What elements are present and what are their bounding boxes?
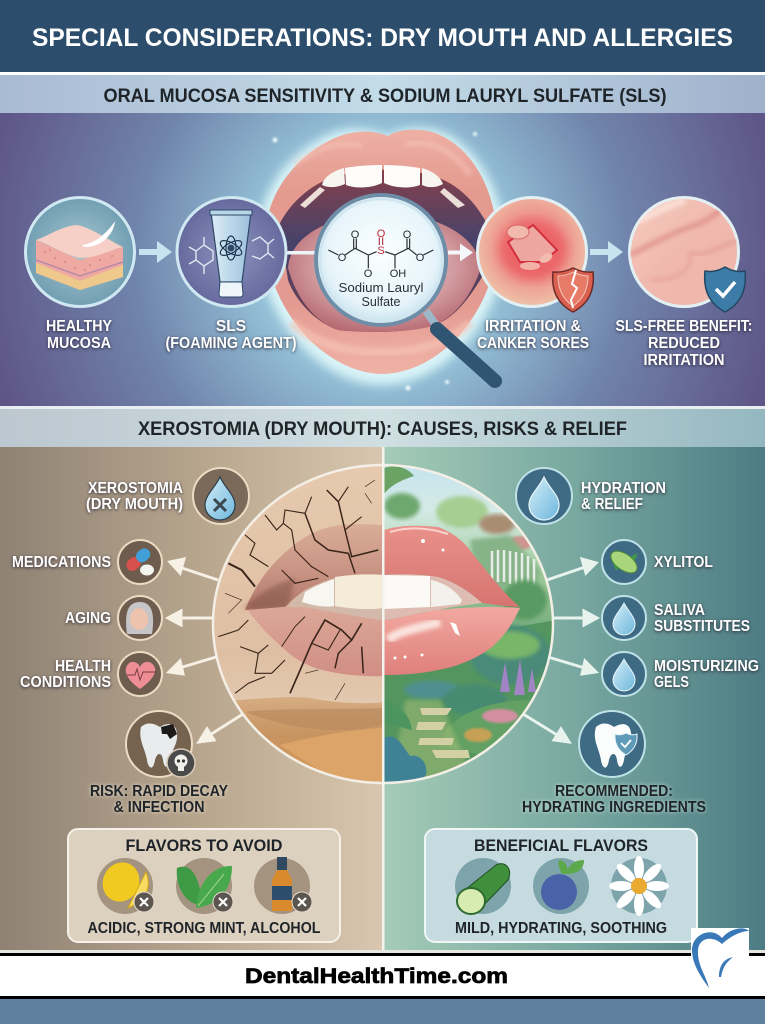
label (654, 602, 750, 635)
arrow: irritation to benefit (590, 241, 623, 263)
icon: tooth with shield (579, 711, 645, 777)
label: healthy mucosa (46, 318, 113, 352)
label: irritation and canker sores (477, 318, 589, 352)
arrow: lips to health conditions (169, 657, 216, 674)
arrow: lips to recommended (523, 714, 569, 742)
icon: magnifying glass with SLS molecule (316, 195, 495, 381)
molecule diagram: O (364, 268, 373, 280)
icon: water drop (602, 652, 646, 696)
label: healthy mucosa: MUCOSA (47, 335, 111, 352)
label: SLS-free benefit: SLS-FREE BENEFIT: (616, 318, 752, 335)
arrow: healthy to SLS (139, 241, 172, 263)
badge: broken red shield (553, 268, 593, 312)
label (581, 480, 666, 513)
arrow: lips to risk (199, 714, 243, 742)
molecule diagram: O (377, 228, 386, 240)
item: moisturizing gels (602, 652, 759, 696)
arrow: SLS to magnifier (286, 251, 318, 254)
label: & RELIEF (581, 496, 643, 513)
molecule diagram: S (377, 245, 385, 257)
molecule diagram: OH (390, 268, 406, 280)
label: & INFECTION (114, 799, 204, 816)
arrow: lips to medications (170, 559, 218, 580)
label: SLS foaming agent: SLS (216, 318, 246, 335)
icon: alcohol bottle (254, 857, 312, 914)
molecule diagram: O (416, 252, 425, 264)
label: RECOMMENDED: (555, 783, 673, 800)
icon: water drop (602, 596, 646, 640)
label: HYDRATING INGREDIENTS (522, 799, 706, 816)
item: medications (12, 540, 162, 584)
molecule diagram: O (338, 252, 347, 264)
label (522, 783, 706, 816)
arrow: lips to moisturizing gels (548, 657, 596, 674)
molecule diagram: O (403, 229, 412, 241)
label: HYDRATION (581, 480, 666, 497)
icon: blueberry (533, 858, 589, 914)
icon: cucumber (455, 858, 511, 914)
label: MOISTURIZING (654, 658, 759, 675)
section heading: xerostomia: XEROSTOMIA (DRY MOUTH): CAUSES, RISKS & RELIEF (138, 418, 627, 440)
item: xerostomia (86, 468, 249, 524)
panel: dry mouth relief (213, 447, 765, 950)
label: SLS-free benefit: REDUCED (648, 335, 720, 352)
icon: heart with pulse (118, 652, 162, 696)
icon: cucumber leaf (602, 540, 646, 584)
panel: oral mucosa and SLS (0, 113, 765, 406)
label (20, 658, 111, 691)
section heading: oral mucosa: ORAL MUCOSA SENSITIVITY & SODIUM LAURYL SULFATE (SLS) (104, 85, 666, 107)
item: saliva substitutes (602, 596, 750, 640)
label: irritation and canker sores: IRRITATION & (485, 318, 581, 335)
callout: beneficial flavors: BENEFICIAL FLAVORS (474, 837, 648, 855)
icon: magnifying glass with SLS molecule: Sulfate (362, 295, 401, 309)
icon: mint leaves (176, 858, 233, 914)
icon: tooth logo (691, 928, 749, 988)
label: HEALTH (55, 658, 111, 675)
arrow: magnifier to irritation (448, 244, 473, 262)
label: irritation and canker sores: CANKER SORES (477, 335, 589, 352)
callout: beneficial flavors: MILD, HYDRATING, SOOTHING (455, 920, 667, 937)
arrow: lips to aging (168, 611, 213, 625)
callout: flavors to avoid: ACIDIC, STRONG MINT, ALCOHOL (88, 920, 320, 937)
label: SLS-free benefit: IRRITATION (644, 352, 724, 369)
label: healthy mucosa: HEALTHY (46, 318, 113, 335)
label: SLS foaming agent (166, 318, 296, 352)
icon: pills (118, 540, 162, 584)
label (654, 658, 759, 691)
label: SLS foaming agent: (FOAMING AGENT) (166, 335, 296, 352)
item: hydration and relief (516, 468, 666, 524)
sparkles (272, 132, 477, 390)
icon: irritation and canker sore (478, 198, 593, 312)
item: health conditions (20, 652, 162, 696)
label (90, 783, 229, 816)
illustration: open mouth (258, 128, 505, 385)
label: XYLITOL (654, 554, 713, 571)
icon: lemon (96, 856, 154, 914)
label: RISK: RAPID DECAY (90, 783, 229, 800)
label: (DRY MOUTH) (86, 496, 183, 513)
magnifier label: Sodium Lauryl (338, 281, 424, 295)
circle outline (213, 465, 553, 783)
callout: beneficial flavors (425, 829, 697, 942)
label: MEDICATIONS (12, 554, 111, 571)
icon: SLS-free benefit (630, 198, 745, 312)
label: GELS (654, 674, 689, 691)
molecule diagram: O (351, 229, 360, 241)
label: SALIVA (654, 602, 705, 619)
icon: water drop (516, 468, 572, 524)
label (86, 480, 183, 513)
illustration: hydrated lips and garden (384, 465, 556, 783)
icon: SLS toothpaste tube (177, 198, 286, 306)
icon: crossed water drop (193, 468, 249, 524)
callout: flavors to avoid: FLAVORS TO AVOID (126, 837, 283, 855)
icon: daisy (609, 856, 669, 916)
icon: decayed tooth with skull (126, 711, 195, 777)
footer band (0, 953, 765, 1024)
section heading: xerostomia (0, 409, 765, 447)
section heading: oral mucosa (0, 75, 765, 113)
label: CONDITIONS (20, 674, 111, 691)
label: SUBSTITUTES (654, 618, 750, 635)
title banner (0, 0, 765, 72)
badge: blue check shield (705, 267, 745, 312)
item: risk of decay (90, 711, 229, 816)
molecule diagram (328, 228, 433, 280)
icon: elderly face (118, 596, 162, 640)
label: AGING (65, 610, 111, 627)
label: SLS-free benefit (616, 318, 752, 369)
illustration: cracked dry lips and desert (212, 465, 384, 783)
item: recommended hydrating ingredients (522, 711, 706, 816)
item: aging (65, 596, 162, 640)
arrow: lips to saliva substitutes (552, 611, 597, 625)
website text: DentalHealthTime.com (245, 965, 508, 988)
label: XEROSTOMIA (88, 480, 183, 497)
title text: SPECIAL CONSIDERATIONS: DRY MOUTH AND ALLERGIES (32, 24, 733, 52)
arrow: lips to xylitol (547, 559, 596, 580)
item: xylitol (602, 540, 713, 584)
callout: flavors to avoid (68, 829, 340, 942)
panel: dry mouth causes (0, 447, 384, 950)
icon: healthy mucosa (26, 198, 134, 306)
